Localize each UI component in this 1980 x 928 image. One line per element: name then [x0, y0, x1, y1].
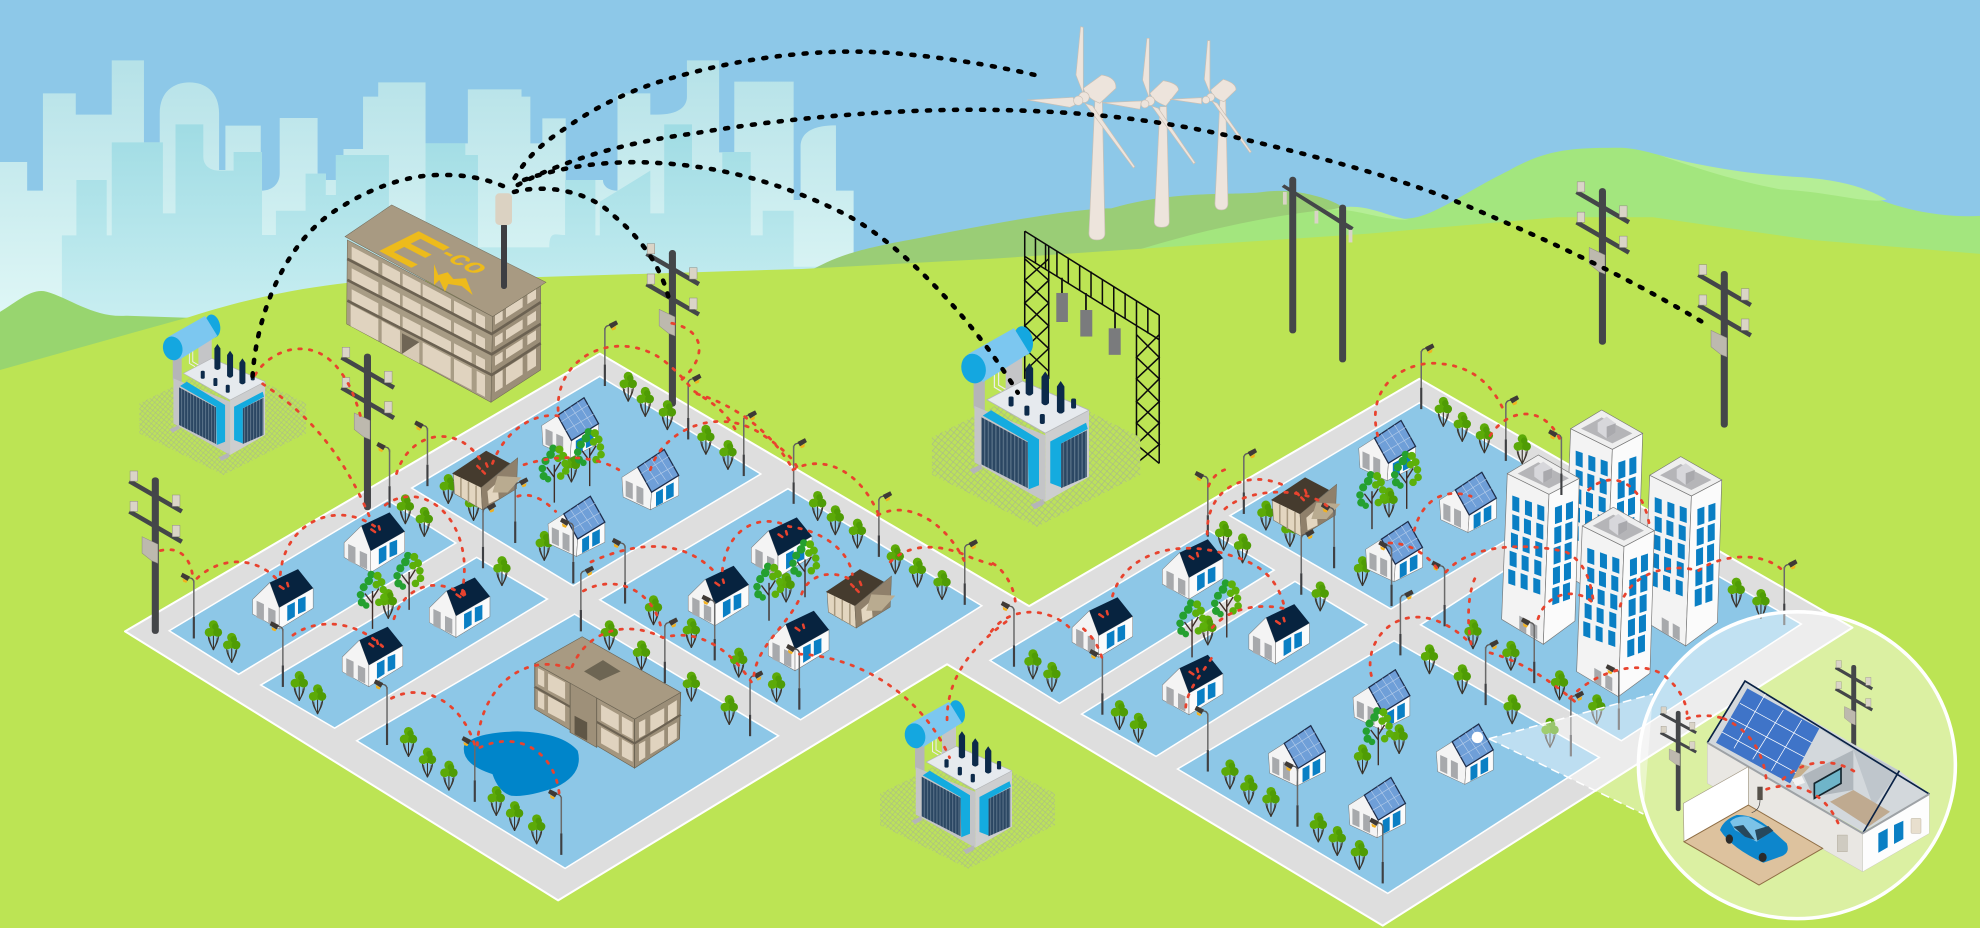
wind turbines: [1027, 27, 1251, 240]
large trees: [357, 428, 1422, 765]
garage: [1683, 767, 1823, 885]
utility poles: [129, 182, 1751, 634]
street lights: [181, 320, 1798, 883]
H-frame utility poles: [1282, 177, 1354, 362]
transformer: south: [880, 699, 1055, 869]
turbine 2: [1103, 38, 1195, 227]
wall monitor: [1814, 768, 1841, 798]
ground: [0, 217, 1980, 928]
pond: [464, 731, 579, 796]
turbine 1: [1027, 27, 1135, 240]
transformer: west: [139, 313, 306, 475]
magnifier circle: [1638, 612, 1955, 919]
turbine 3: [1170, 41, 1251, 210]
road network: [125, 354, 1852, 926]
logo text: [363, 223, 498, 295]
small trees: [205, 372, 1770, 870]
small commercial buildings: [452, 451, 1340, 628]
logo text: E: [363, 223, 465, 275]
lens: rear pole: [1836, 661, 1872, 775]
houses with dark roofs: [253, 512, 1309, 715]
substation gantry: [1025, 231, 1159, 463]
transformer: substation: [932, 324, 1140, 527]
logo text: -co: [431, 244, 498, 278]
back hills: [0, 148, 1980, 379]
cutaway solar home with EV: [1683, 681, 1929, 885]
red mesh network links: [160, 323, 1860, 827]
rooftop solar array: [1716, 688, 1819, 783]
electric car: [1720, 815, 1788, 863]
lens: street pole: [1661, 707, 1696, 811]
cutaway house: [1707, 681, 1929, 872]
city skyline silhouette: [0, 60, 854, 367]
gantry insulators: [1056, 278, 1121, 355]
headquarters building: [345, 193, 546, 402]
houses with solar panels: [542, 398, 1496, 838]
detail beam from house to magnifier: [1472, 694, 1653, 814]
black wireless links from antenna: [253, 52, 1707, 393]
rooftop antenna: [495, 193, 512, 289]
high-rise towers: [1502, 410, 1722, 697]
inverter: [1792, 776, 1805, 786]
neighbourhood lots: [169, 376, 1801, 893]
large school building: [535, 637, 681, 768]
